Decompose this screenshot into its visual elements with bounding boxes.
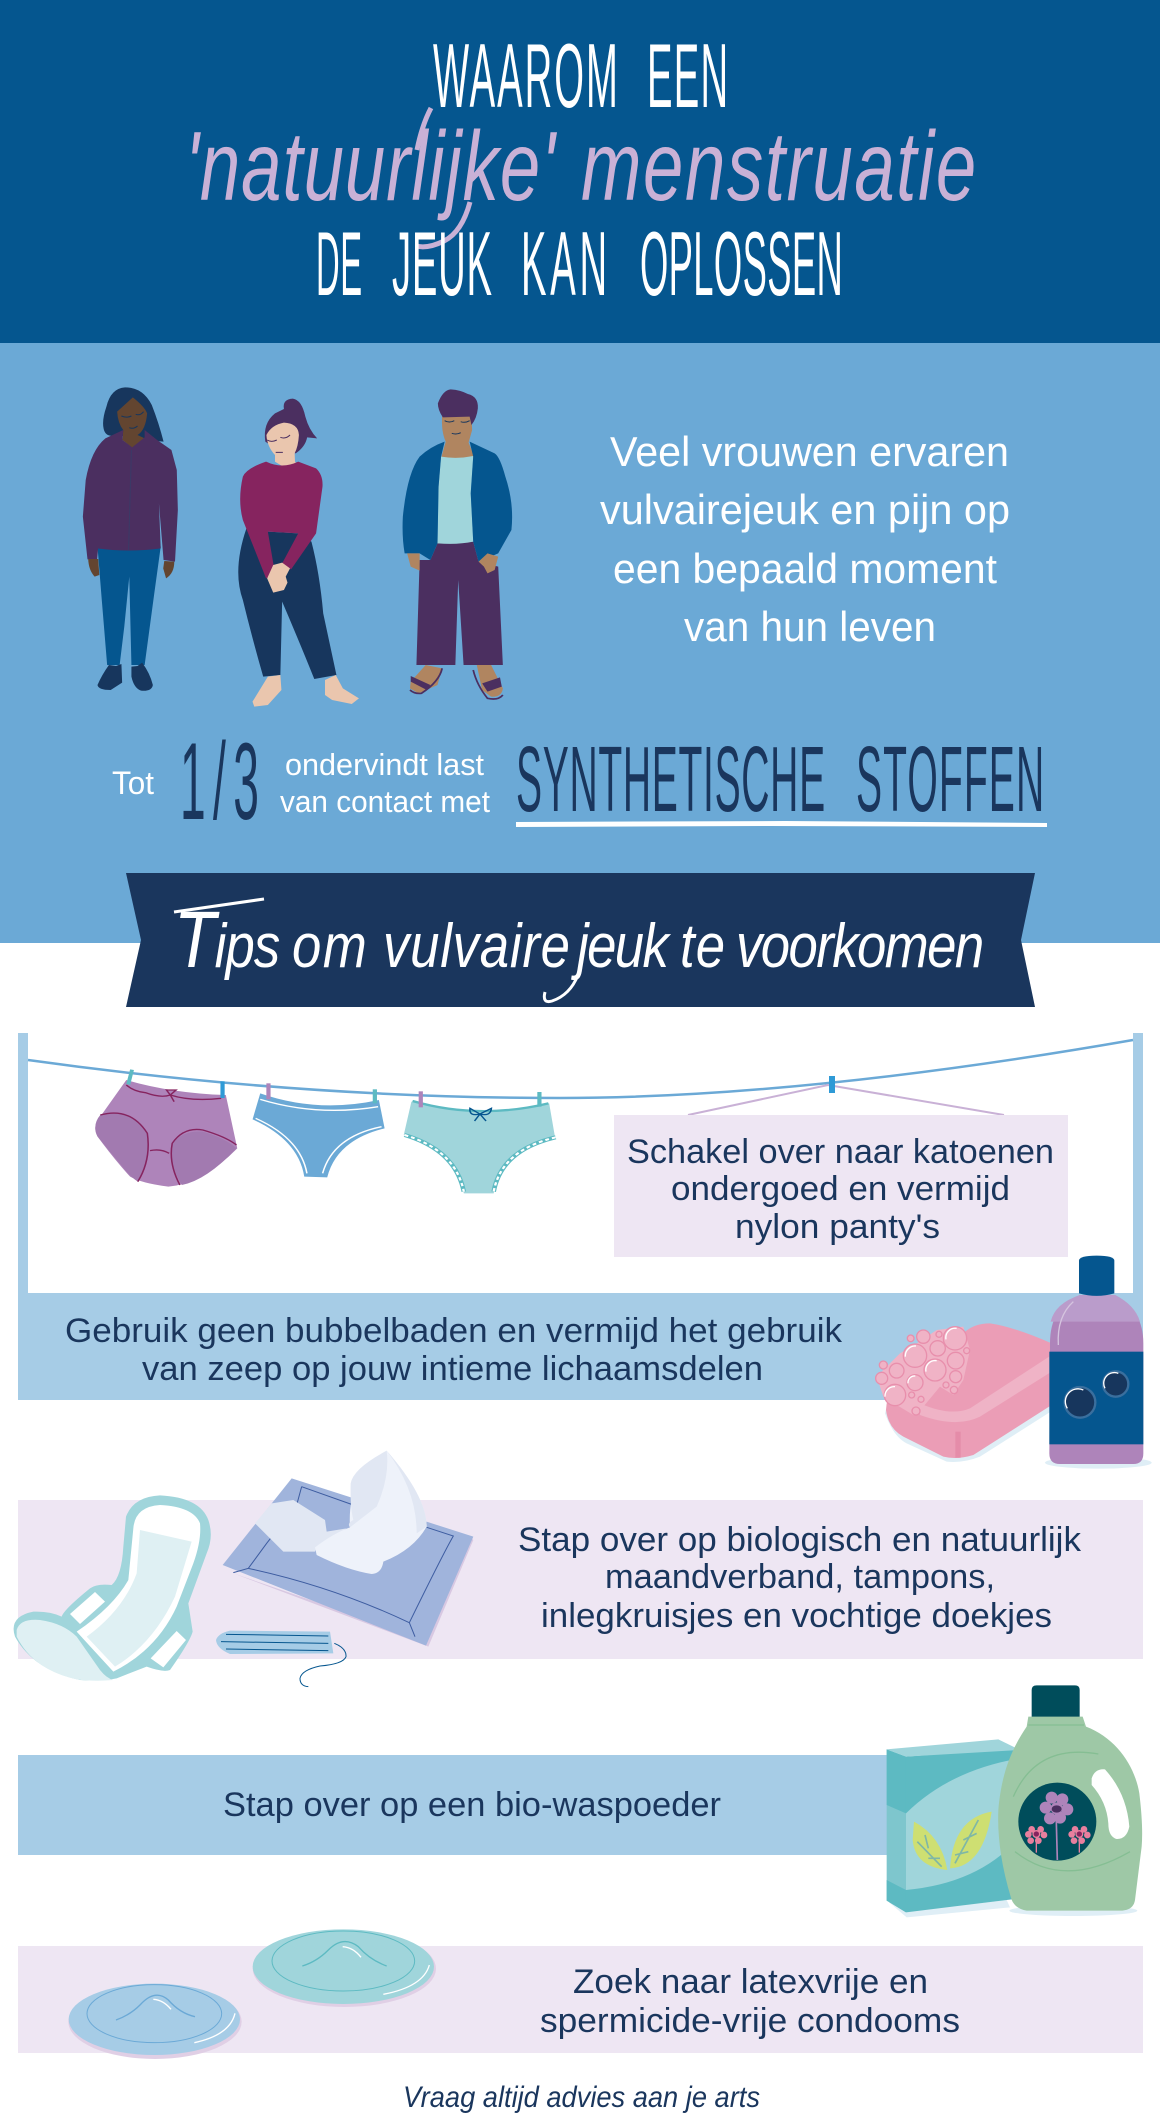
icon: blue condom bbox=[68, 1984, 242, 2059]
text: statistic: ondervindt last bbox=[285, 747, 484, 782]
icon: teal condom bbox=[253, 1929, 436, 2007]
illustration: underwear on line bbox=[95, 1069, 556, 1193]
title line 3: OPLOSSEN bbox=[640, 212, 843, 315]
text: statistic: SYNTHETISCHE bbox=[516, 728, 825, 832]
banner: tips heading: te bbox=[680, 912, 725, 981]
icon: detergent bottle bbox=[998, 1685, 1142, 1916]
panel: header bbox=[0, 0, 1160, 343]
callout: cotton underwear bbox=[614, 1076, 1068, 1257]
title line 3 bbox=[316, 212, 843, 315]
title line 3: JEUK bbox=[392, 213, 492, 315]
banner: tips heading: jeuk bbox=[571, 912, 672, 981]
title line 2 script bbox=[185, 108, 976, 247]
text: statistic: van contact met bbox=[280, 784, 490, 819]
tip bar: soap: Gebruik geen bubbelbaden en vermijd het gebruik bbox=[65, 1312, 843, 1350]
callout: cotton underwear: Schakel over naar katoenen bbox=[627, 1133, 1054, 1171]
icon: sanitary pad bbox=[14, 1495, 211, 1681]
clothes pegs bbox=[126, 1069, 542, 1107]
tip bar: products: maandverband, tampons, bbox=[605, 1558, 995, 1596]
icon: teal briefs bbox=[404, 1101, 556, 1193]
text: intro statement: vulvairejeuk en pijn op bbox=[600, 486, 1010, 533]
tip bar: products bbox=[18, 1500, 1143, 1659]
illustration: detergent bbox=[887, 1685, 1142, 1917]
icon: bottle bbox=[1045, 1256, 1152, 1469]
icon: blue briefs bbox=[253, 1093, 385, 1177]
tip bar: products: Stap over op biologisch en natuurlijk bbox=[518, 1521, 1082, 1559]
illustration: three women bbox=[83, 387, 512, 707]
banner: tips heading: Tips bbox=[174, 895, 280, 984]
figure: woman in cardigan bbox=[403, 389, 512, 699]
text: statistic: 1/3 bbox=[180, 720, 259, 842]
text: statistic bbox=[112, 720, 1047, 842]
illustration: condoms bbox=[68, 1929, 436, 2059]
icon: washing powder box bbox=[887, 1739, 1020, 1917]
text: intro statement: van hun leven bbox=[684, 603, 936, 650]
banner: tips heading bbox=[126, 873, 1035, 1007]
footer note: Vraag altijd advies aan je arts bbox=[403, 2081, 760, 2114]
tip bar: condoms: Zoek naar latexvrije en bbox=[573, 1963, 928, 2001]
icon: wipes pack bbox=[223, 1451, 473, 1647]
text: intro statement bbox=[600, 428, 1010, 650]
text: intro statement: Veel vrouwen ervaren bbox=[610, 428, 1009, 475]
clothesline posts bbox=[18, 1033, 1143, 1313]
clothesline rope bbox=[28, 1040, 1133, 1098]
banner: tips heading: voorkomen bbox=[736, 912, 984, 981]
illustration: hygiene products bbox=[14, 1451, 473, 1687]
title line 2 script: 'natuurlijke' bbox=[185, 112, 557, 222]
text: statistic: Tot bbox=[112, 765, 154, 801]
tip bar: condoms bbox=[18, 1946, 1143, 2053]
tip bar: detergent bbox=[18, 1755, 898, 1855]
title line 1: EEN bbox=[647, 25, 728, 127]
tip bar: soap bbox=[18, 1293, 1143, 1400]
tip bar: detergent: Stap over op een bio-waspoeder bbox=[223, 1786, 721, 1824]
figure: woman with itch bbox=[238, 399, 359, 707]
text: statistic: STOFFEN bbox=[856, 728, 1044, 832]
callout: cotton underwear: ondergoed en vermijd bbox=[671, 1170, 1010, 1208]
title line 2 script: menstruatie bbox=[581, 112, 976, 222]
panel: intro bbox=[0, 343, 1160, 943]
title line 3: DE bbox=[316, 214, 362, 315]
tip bar: condoms: spermicide-vrije condooms bbox=[540, 2002, 960, 2040]
title line 3: KAN bbox=[521, 213, 607, 315]
icon: soap bbox=[876, 1323, 1053, 1462]
icon: purple briefs bbox=[95, 1080, 237, 1187]
banner: tips heading: vulvaire bbox=[383, 912, 570, 981]
illustration: soap and bottle bbox=[876, 1256, 1152, 1469]
banner: tips heading: om bbox=[292, 912, 367, 981]
tip bar: soap: van zeep op jouw intieme lichaamsdelen bbox=[142, 1350, 763, 1388]
title line 1: WAAROM bbox=[433, 25, 618, 127]
tip bar: products: inlegkruisjes en vochtige doekjes bbox=[541, 1597, 1052, 1635]
icon: tampon bbox=[216, 1631, 346, 1687]
callout: cotton underwear: nylon panty's bbox=[735, 1208, 940, 1246]
figure: woman in hoodie bbox=[83, 387, 178, 691]
title line 1 bbox=[433, 25, 728, 127]
text: intro statement: een bepaald moment bbox=[613, 545, 997, 592]
